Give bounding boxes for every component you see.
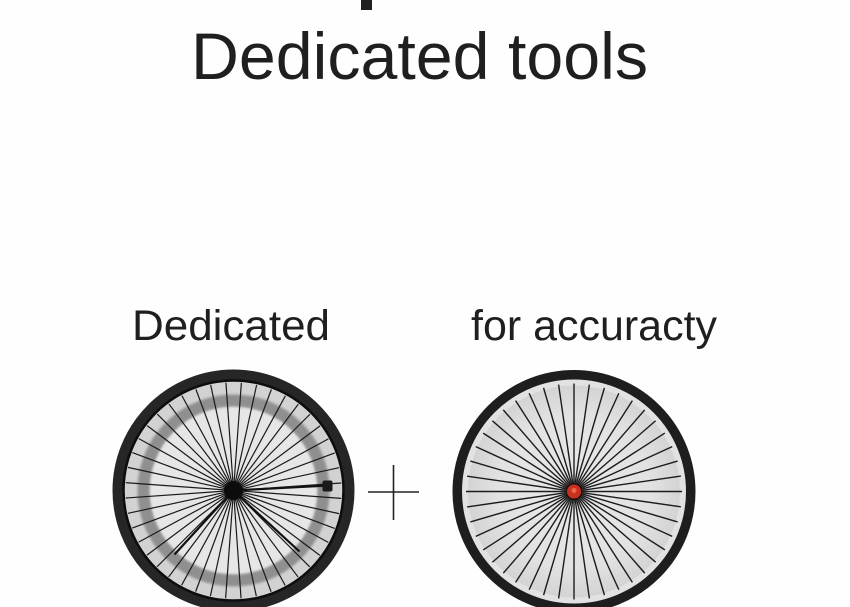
icon: left bicycle wheel [118, 375, 349, 606]
red hub [565, 482, 583, 500]
silver rim [465, 382, 683, 600]
icon: plus sign [368, 465, 419, 520]
spokes [466, 384, 682, 600]
tire [118, 375, 349, 606]
title: Dedicated tools [191, 19, 648, 93]
right label: for accuracty [471, 302, 717, 350]
cropped glyph at top edge [361, 0, 372, 10]
thick spokes [174, 486, 328, 554]
icon: right bicycle wheel [458, 375, 690, 607]
spokes [118, 375, 349, 606]
grey rim band [144, 400, 324, 580]
left label: Dedicated [132, 302, 330, 350]
tire [458, 375, 690, 607]
hub [224, 481, 243, 500]
valve block [322, 480, 332, 492]
inner rim line [124, 380, 344, 600]
inner disc [150, 406, 318, 574]
